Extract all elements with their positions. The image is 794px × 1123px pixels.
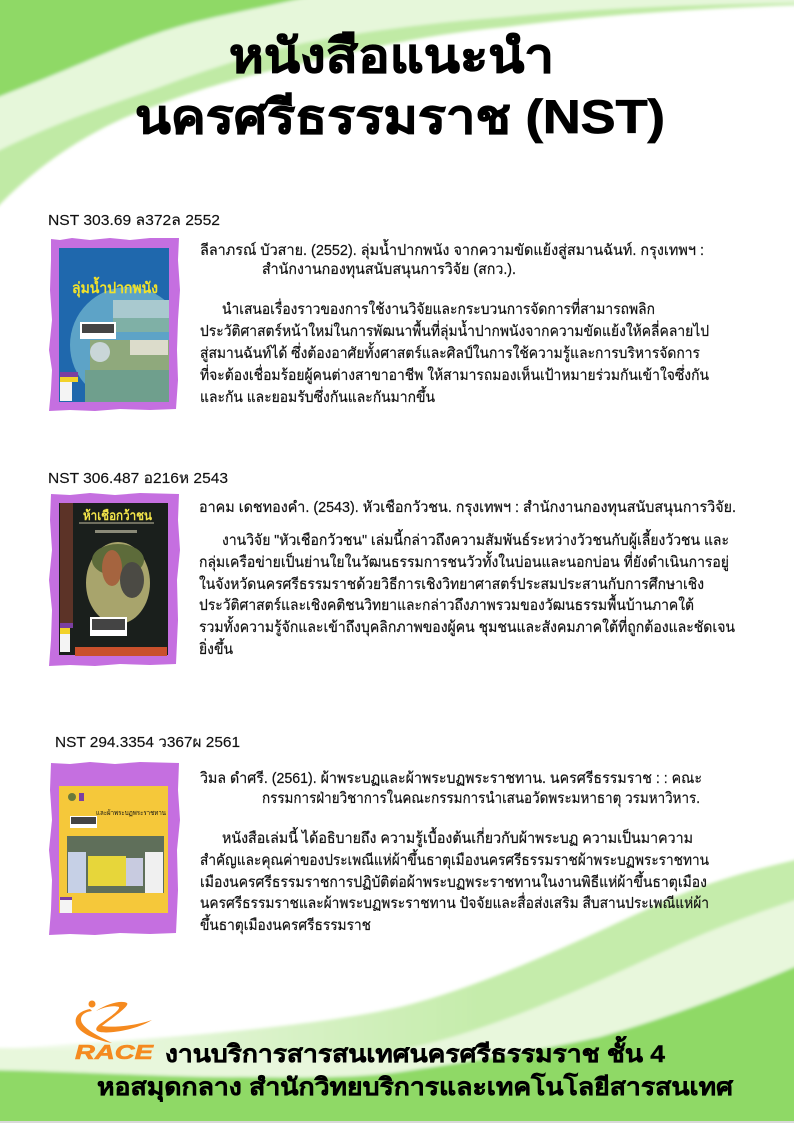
- summary 3: เมืองนครศรีธรรมราชการปฏิบัติต่อผ้าพระบฏพระราชทานในงานพิธีแห่ผ้าขึ้นธาตุเมือง: [200, 871, 707, 892]
- citation 3: [199, 770, 702, 808]
- title: หนังสือแนะนำ: [229, 29, 554, 82]
- book cover 1: [49, 238, 186, 411]
- book cover 2: ห้าเชือกว้าชน: [83, 508, 152, 523]
- title: [135, 29, 665, 143]
- citation 1: ลีลาภรณ์ บัวสาย. (2552). ลุ่มน้ำปากพนัง จากความขัดแย้งสู่สมานฉันท์. กรุงเทพฯ :: [200, 239, 704, 260]
- citation 3: วิมล ดำศรี. (2561). ผ้าพระบฏและผ้าพระบฏพระราชทาน. นครศรีธรรมราช : : คณะ: [199, 770, 702, 787]
- call number 2: NST 306.487 อ216ห 2543: [48, 470, 228, 487]
- panel: book 3: [49, 734, 709, 935]
- book cover 3: [49, 762, 180, 935]
- citation 1: สำนักงานกองทุนสนับสนุนการวิจัย (สกว.).: [262, 261, 516, 279]
- summary 3: นครศรีธรรมราชและผ้าพระบฏพระราชทาน ปัจจัยและสื่อส่งเสริม สืบสานประเพณีแห่ผ้า: [200, 892, 709, 912]
- citation 2: อาคม เดชทองคำ. (2543). หัวเชือกวัวชน. กรุงเทพฯ : สำนักงานกองทุนสนับสนุนการวิจัย.: [199, 499, 736, 517]
- summary 3: [200, 827, 709, 935]
- panel: book 2: [48, 470, 736, 666]
- summary 1: นำเสนอเรื่องราวของการใช้งานวิจัยและกระบวนการจัดการที่สามารถพลิก: [222, 298, 655, 318]
- book cover 3: และผ้าพระบฏพระราชทาน: [96, 809, 166, 817]
- summary 1: ที่จะต้องเชื่อมร้อยผู้คนต่างสาขาอาชีพ ให้สามารถมองเห็นเป้าหมายร่วมกันเข้าใจซึ่งกัน: [200, 364, 709, 384]
- footer text: [97, 1035, 734, 1103]
- call number 1: NST 303.69 ล372ล 2552: [48, 212, 220, 229]
- summary 1: ประวัติศาสตร์หน้าใหม่ในการพัฒนาพื้นที่ลุ่มน้ำปากพนังจากความขัดแย้งให้คลี่คลายไป: [200, 320, 709, 341]
- bottom background swoosh: [0, 858, 794, 1123]
- footer text: งานบริการสารสนเทศนครศรีธรรมราช ชั้น 4: [165, 1035, 666, 1068]
- summary 1: และกัน และยอมรับซึ่งกันและกันมากขึ้น: [200, 386, 435, 406]
- panel: book 1: [48, 212, 709, 411]
- book cover 1: ลุ่มน้ำปากพนัง: [72, 276, 158, 298]
- footer text: หอสมุดกลาง สำนักวิทยบริการและเทคโนโลยีสารสนเทศ: [97, 1072, 734, 1103]
- summary 2: งานวิจัย "หัวเชือกวัวชน" เล่มนี้กล่าวถึงความสัมพันธ์ระหว่างวัวชนกับผู้เลี้ยงวัวชน และ: [222, 529, 729, 549]
- summary 3: สำคัญและคุณค่าของประเพณีแห่ผ้าขึ้นธาตุเมืองนครศรีธรรมราชผ้าพระบฏพระราชทาน: [200, 849, 709, 870]
- summary 2: รวมทั้งความรู้จักและเข้าถึงบุคลิกภาพของผู้คน ชุมชนและสังคมภาคใต้ที่ถูกต้องและชัดเจน: [199, 616, 735, 637]
- summary 2: ในจังหวัดนครศรีธรรมราชด้วยวิธีการเชิงวิทยาศาสตร์ประสมประสานกับการศึกษาเชิง: [199, 575, 704, 593]
- book cover 2: [49, 493, 180, 666]
- summary 2: ประวัติศาสตร์และเชิงคติชนวิทยาและกล่าวถึงภาพรวมของวัฒนธรรมพื้นบ้านภาคใต้: [199, 594, 694, 614]
- summary 3: ขึ้นธาตุเมืองนครศรีธรรมราช: [200, 914, 371, 935]
- citation 1: [200, 239, 704, 279]
- summary 2: ยิ่งขึ้น: [199, 638, 233, 658]
- logo: RACE: RACE: [75, 1042, 154, 1064]
- summary 1: [200, 298, 709, 406]
- summary 2: กลุ่มเครือข่ายเป็นย่านใยในวัฒนธรรมการชนวัวทั้งในบ่อนและนอกบ่อน ที่ยังดำเนินการอยู่: [199, 551, 729, 572]
- top background swoosh: [0, 0, 794, 215]
- citation 3: กรรมการฝ่ายวิชาการในคณะกรรมการนำเสนอวัดพระมหาธาตุ วรมหาวิหาร.: [262, 789, 700, 808]
- call number 3: NST 294.3354 ว367ผ 2561: [55, 734, 240, 751]
- title: นครศรีธรรมราช (NST): [135, 90, 665, 143]
- logo: RACE: [75, 1000, 154, 1064]
- summary 3: หนังสือเล่มนี้ ได้อธิบายถึง ความรู้เบื้องต้นเกี่ยวกับผ้าพระบฏ ความเป็นมาความ: [222, 827, 693, 847]
- summary 2: [199, 529, 735, 658]
- summary 1: สู่สมานฉันท์ได้ ซึ่งต้องอาศัยทั้งศาสตร์และศิลป์ในการใช้ความรู้และการบริหารจัดการ: [200, 342, 700, 362]
